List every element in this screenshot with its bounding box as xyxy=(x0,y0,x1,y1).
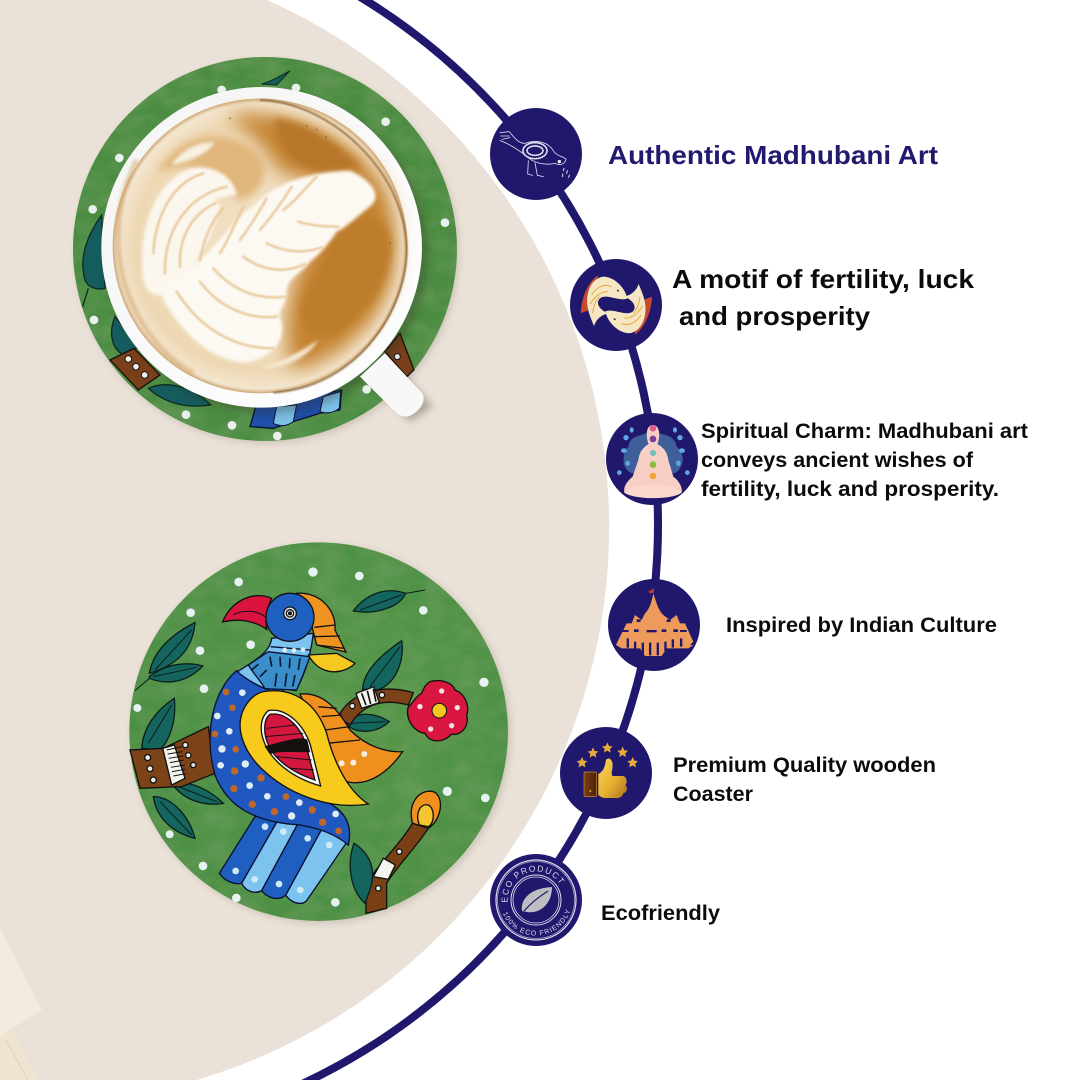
text: premium quality: Premium Quality wooden xyxy=(673,754,936,777)
icon: eco product badge: ECO PRODUCT xyxy=(502,866,565,902)
caramel crema xyxy=(227,114,395,370)
teal leaves xyxy=(142,591,406,903)
text: spiritual charm: fertility, luck and prosperity. xyxy=(701,478,999,501)
left brown branch xyxy=(130,727,215,788)
bird head and beak xyxy=(223,593,314,641)
white dots on coaster xyxy=(133,567,490,907)
coffee surface xyxy=(113,99,407,393)
green coaster base xyxy=(129,542,508,921)
lower right branch with bud xyxy=(366,791,440,913)
bird neck xyxy=(237,633,313,691)
coaster with coffee cup xyxy=(73,57,459,443)
text: fertility motif: A motif of fertility, luck xyxy=(672,264,975,294)
icon: meditating figure with chakras xyxy=(606,413,698,505)
white dots on coaster xyxy=(88,84,449,440)
text: ecofriendly: Ecofriendly xyxy=(601,902,720,925)
partly hidden painted motifs xyxy=(83,71,414,428)
bird crest and wattle xyxy=(297,593,355,672)
white cup xyxy=(101,87,422,408)
upper swirl xyxy=(142,167,237,296)
cup handle xyxy=(360,353,433,422)
feather xyxy=(163,171,376,363)
paper corner bottom left xyxy=(0,928,42,1080)
coaster with painted Madhubani bird xyxy=(129,542,511,923)
dark speckles xyxy=(229,117,391,244)
dark rim line xyxy=(260,100,407,393)
beige semicircle backdrop xyxy=(0,0,609,1080)
right brown branch xyxy=(338,687,413,725)
icon: eco product badge xyxy=(490,854,582,946)
icon: thumbs up with stars xyxy=(560,727,652,819)
coaster shadow xyxy=(132,545,511,923)
bird body xyxy=(210,671,350,845)
icon: temple xyxy=(608,579,700,671)
leaf stems xyxy=(135,590,425,835)
text: fertility motif: and prosperity xyxy=(679,301,871,331)
text: premium quality: Coaster xyxy=(673,783,753,806)
icon: peacock xyxy=(490,108,582,200)
green coaster top xyxy=(73,57,457,441)
text: Indian culture: Inspired by Indian Culture xyxy=(726,614,997,637)
fish two xyxy=(605,284,652,335)
text: spiritual charm xyxy=(701,420,1028,501)
text: spiritual charm: Spiritual Charm: Madhubani art xyxy=(701,420,1028,443)
text: spiritual charm: conveys ancient wishes of xyxy=(701,449,974,472)
heading: Authentic Madhubani Art: Authentic Madhubani Art xyxy=(608,140,938,170)
cup shadow xyxy=(107,93,428,414)
text: premium quality xyxy=(673,754,936,806)
latte art leaf xyxy=(142,143,376,368)
coaster shadow xyxy=(76,61,459,443)
bird tail feathers xyxy=(219,817,348,903)
orange tail wing xyxy=(300,694,403,783)
text: fertility motif xyxy=(672,264,975,331)
icon: twin fish xyxy=(570,259,662,351)
red flower xyxy=(408,681,468,741)
icon: eco product badge: 100% ECO FRIENDLY xyxy=(503,909,570,936)
navy timeline arc xyxy=(301,0,662,1080)
latte streaks xyxy=(153,173,338,348)
yellow paisley wing xyxy=(240,691,368,805)
fish one xyxy=(581,275,627,326)
